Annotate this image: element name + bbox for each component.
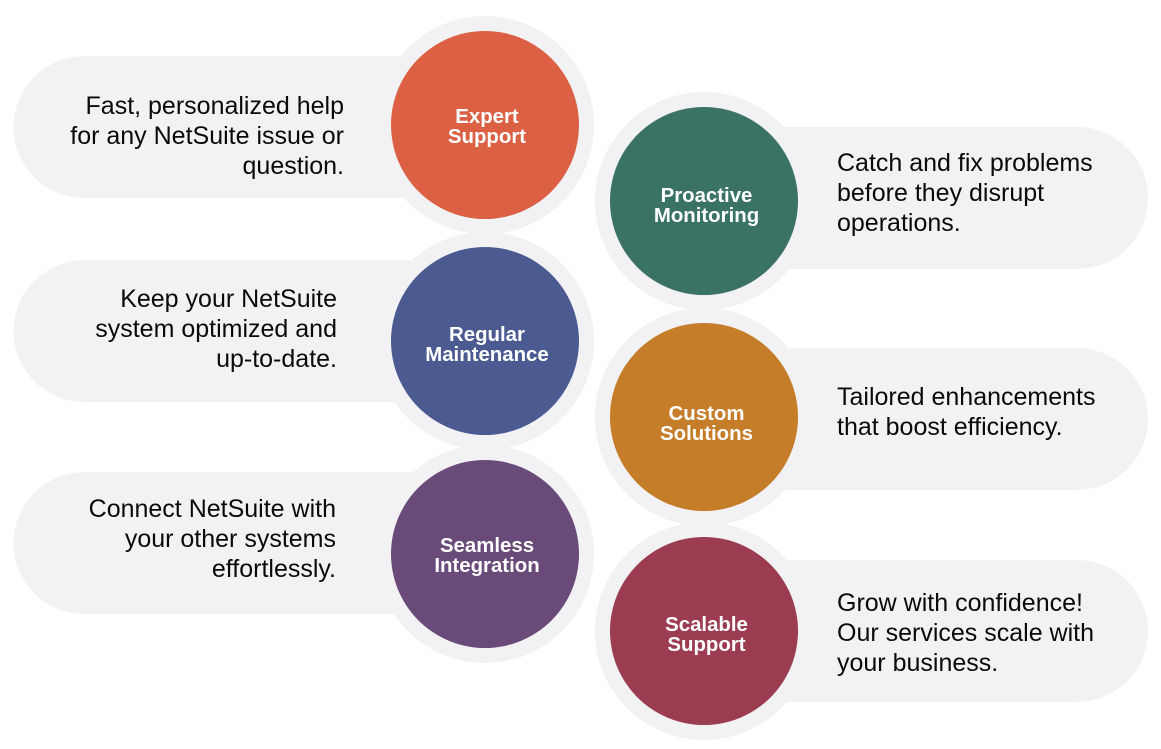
label: seamless integration: Seamless <box>440 535 534 557</box>
text: expert support description: question. <box>243 152 344 180</box>
panel: scalable support <box>595 522 1148 740</box>
text: custom solutions description: that boost efficiency. <box>837 413 1063 441</box>
label: expert support: Support <box>448 126 526 148</box>
label: custom solutions: Solutions <box>660 423 753 445</box>
label: custom solutions: Custom <box>669 403 744 425</box>
panel: expert support <box>14 16 594 234</box>
label: scalable support: Scalable <box>665 614 748 636</box>
circle: scalable support <box>610 537 798 725</box>
label: proactive monitoring: Monitoring <box>654 205 759 227</box>
circle: regular maintenance <box>391 247 579 435</box>
panel: seamless integration <box>14 445 594 663</box>
label: proactive monitoring: Proactive <box>661 185 752 207</box>
label: scalable support: Support <box>667 634 746 656</box>
text: proactive monitoring description: operations. <box>837 209 961 237</box>
label: regular maintenance: Regular <box>449 324 525 346</box>
panel: proactive monitoring <box>595 92 1148 310</box>
circle: proactive monitoring <box>610 107 798 295</box>
text: seamless integration description: Connect NetSuite with <box>89 495 336 523</box>
text: custom solutions description: Tailored enhancements <box>837 383 1096 411</box>
text: proactive monitoring description: Catch and fix problems <box>837 149 1093 177</box>
text: scalable support description: Grow with confidence! <box>837 589 1083 617</box>
label: expert support: Expert <box>455 106 519 128</box>
circle: custom solutions <box>610 323 798 511</box>
text: seamless integration description: effortlessly. <box>212 555 336 583</box>
text: regular maintenance description: system optimized and <box>95 315 337 343</box>
text: proactive monitoring description: before they disrupt <box>837 179 1044 207</box>
panel: custom solutions <box>595 308 1148 526</box>
circle: expert support <box>391 31 579 219</box>
text: expert support description: for any NetSuite issue or <box>70 122 344 150</box>
panel: regular maintenance <box>14 232 594 450</box>
text: regular maintenance description: Keep your NetSuite <box>120 285 337 313</box>
circle: seamless integration <box>391 460 579 648</box>
text: regular maintenance description: up-to-date. <box>216 345 337 373</box>
label: seamless integration: Integration <box>434 555 540 577</box>
label: regular maintenance: Maintenance <box>425 344 549 366</box>
text: scalable support description: your business. <box>837 649 998 677</box>
text: expert support description: Fast, personalized help <box>86 92 344 120</box>
text: scalable support description: Our services scale with <box>837 619 1094 647</box>
text: seamless integration description: your other systems <box>125 525 336 553</box>
